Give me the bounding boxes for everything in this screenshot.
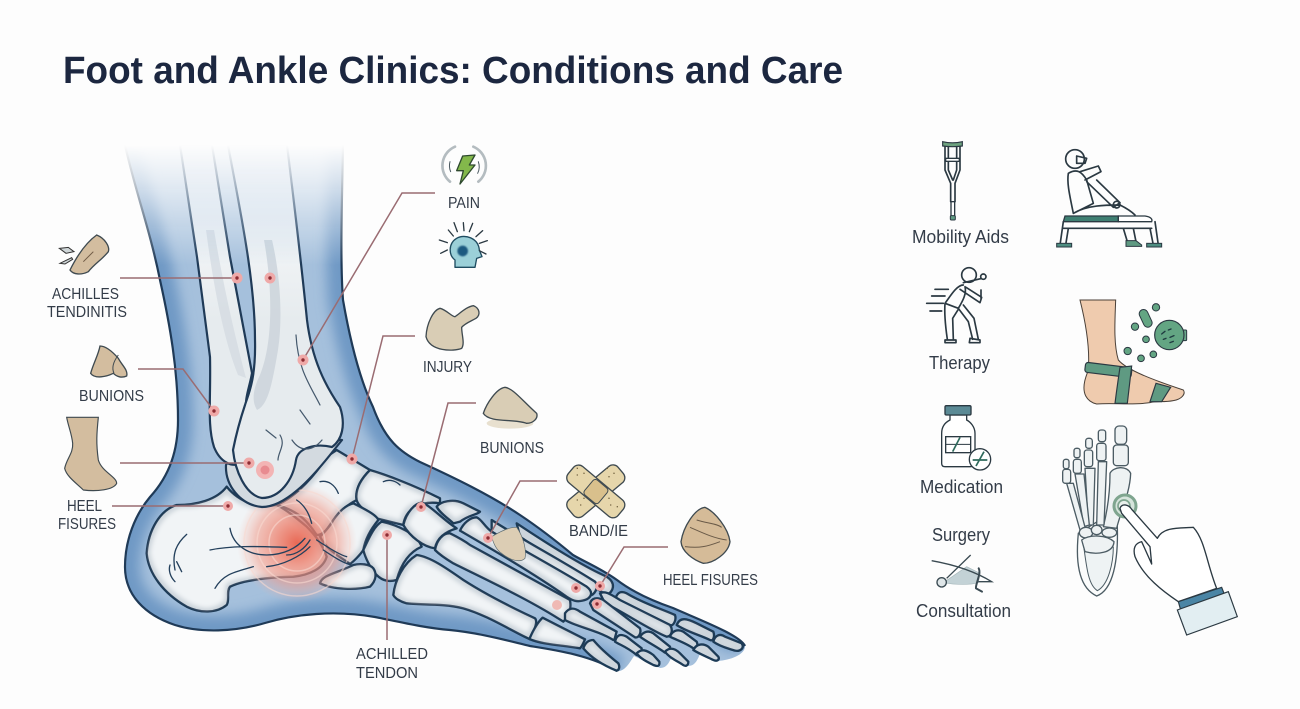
label: achilled tendon: ACHILLED	[356, 646, 428, 663]
label: pain: PAIN	[448, 195, 480, 212]
icon: medication bottle	[942, 406, 991, 470]
label: therapy: Therapy	[929, 353, 990, 373]
metatarsal two	[435, 533, 570, 622]
icon: heel fissure right	[681, 507, 730, 563]
label: mobility aids: Mobility Aids	[912, 227, 1009, 247]
label: heel fissures left: HEEL	[67, 498, 102, 515]
label: achilled tendon	[356, 646, 428, 682]
icon: bunions left	[91, 346, 127, 377]
icon: surgical instrument	[932, 555, 992, 592]
metatarsal five	[517, 523, 613, 595]
sleeve	[1177, 592, 1237, 635]
highlighted joint ring	[1114, 495, 1136, 517]
icon: injury bone	[426, 306, 479, 350]
small tarsal	[437, 501, 480, 523]
navicular	[356, 470, 440, 525]
label: achilles tendinitis: TENDINITIS	[47, 304, 127, 321]
pointer dots	[208, 272, 605, 610]
icon: pain bolt	[442, 147, 486, 184]
hindfoot bones	[147, 450, 440, 611]
tibia	[228, 145, 343, 498]
lateral cuneiform	[320, 503, 378, 564]
talar dome	[226, 440, 342, 507]
forefoot bones	[393, 501, 743, 671]
label: heel fissures left	[58, 498, 116, 533]
medial cuneiform	[403, 503, 457, 548]
bunion protrusion	[492, 527, 525, 561]
tibia highlights	[266, 335, 322, 460]
label: injury: INJURY	[423, 359, 472, 376]
label: medication: Medication	[920, 477, 1003, 497]
label: heel fissures left: FISURES	[58, 516, 116, 533]
icon: foot silhouette	[65, 417, 117, 491]
pointer lines	[112, 193, 668, 640]
label: bandage: BAND/IE	[569, 523, 628, 540]
cuboid	[320, 564, 376, 589]
tendon fibres and bone detail lines	[169, 480, 400, 588]
label: achilles tendinitis: ACHILLES	[52, 286, 119, 303]
foot skeleton outline	[1077, 520, 1117, 596]
metatarsal one	[393, 555, 536, 639]
label: consultation: Consultation	[916, 601, 1011, 621]
inflammation glow	[237, 483, 357, 603]
fibula shading	[206, 230, 246, 378]
icon: crutch	[943, 142, 962, 220]
hand	[1120, 505, 1217, 602]
label: bunions right: BUNIONS	[480, 440, 544, 457]
talus	[277, 450, 370, 535]
intermediate cuneiform	[363, 522, 422, 581]
toe bones	[529, 592, 743, 671]
icon: bandage	[564, 462, 628, 521]
label: achilled tendon: TENDON	[356, 665, 418, 682]
anatomical foot and ankle illustration	[112, 145, 745, 671]
title: Foot and Ankle Clinics: Conditions and Care	[63, 50, 843, 92]
skin silhouette	[125, 145, 745, 671]
icon: bunion right	[483, 387, 537, 429]
label: surgery: Surgery	[932, 525, 990, 545]
calcaneus	[147, 487, 327, 611]
label: achilles tendinitis	[47, 286, 127, 321]
fibula	[180, 145, 252, 465]
tibia shading	[254, 240, 280, 410]
metatarsal three	[460, 517, 591, 601]
tarsals	[1079, 527, 1093, 538]
icon: foot skeleton and examining hand	[1063, 426, 1237, 635]
icon: foot with brace and green particles	[1080, 300, 1187, 404]
icon: achilles tendinitis	[59, 235, 109, 274]
label: bunions left: BUNIONS	[79, 388, 144, 405]
icon: therapy figure	[927, 268, 986, 343]
metatarsal four	[492, 520, 597, 595]
shirt cuff	[1178, 587, 1224, 610]
metatarsals and toes	[1063, 426, 1131, 553]
label: heel fissures right: HEEL FISURES	[663, 572, 758, 589]
icon: head with radiating pain	[439, 223, 487, 267]
icon: seated exercise on bench	[1057, 150, 1162, 247]
lower leg bones	[180, 145, 343, 507]
